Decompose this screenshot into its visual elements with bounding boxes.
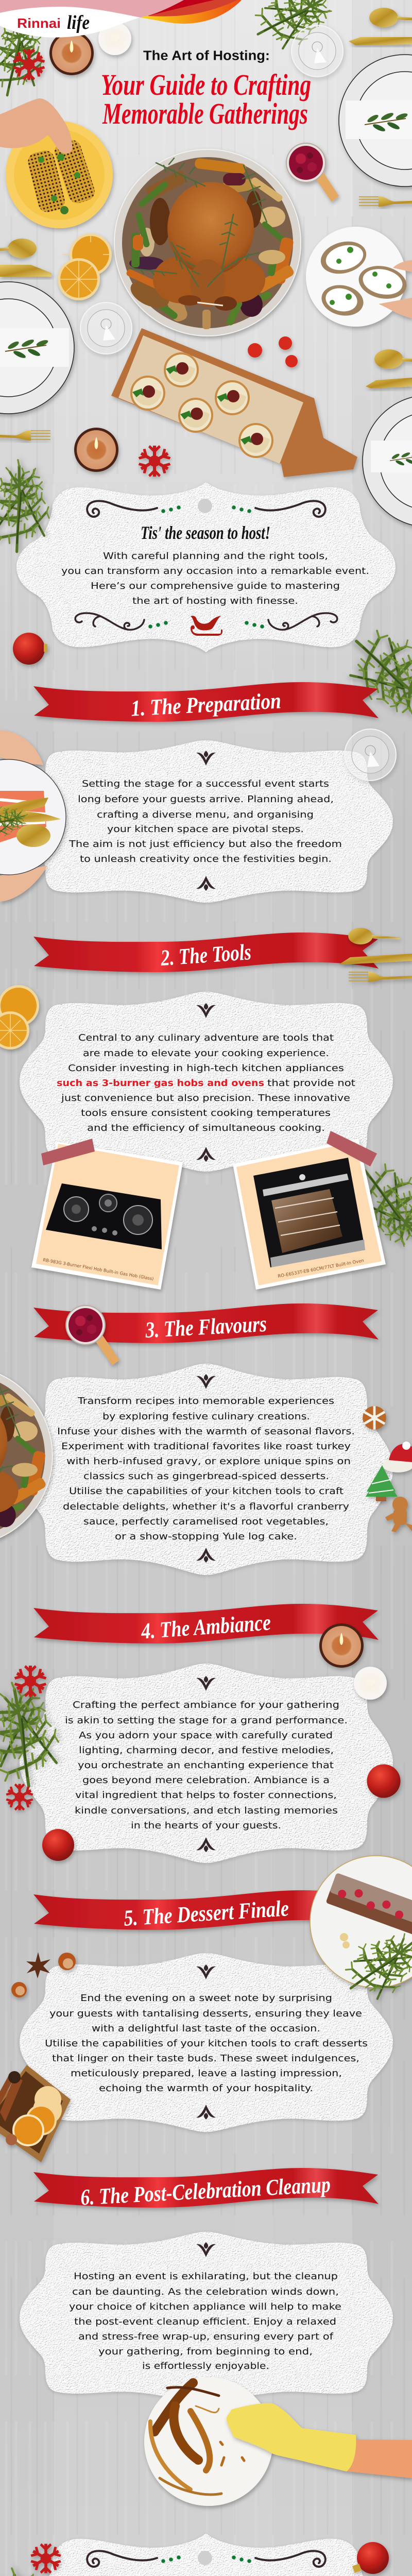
pine right bbox=[330, 612, 412, 744]
caption: RO-E6533T-EB 60CM/77LT Built-In Oven bbox=[278, 1258, 365, 1279]
logo: Rinnai life: life bbox=[67, 12, 90, 33]
pine left bbox=[0, 446, 75, 562]
tomatoes bbox=[248, 336, 298, 367]
text: in the hearts of your guests. bbox=[131, 1821, 281, 1831]
text: are made to elevate your cooking experience. bbox=[83, 1048, 329, 1059]
hang hole bbox=[198, 2551, 212, 2565]
text: with a delightful last taste of the occasion. bbox=[92, 2024, 320, 2034]
logo: Rinnai life bbox=[17, 12, 90, 33]
knife right bbox=[366, 378, 412, 388]
wooden board with canapes bbox=[111, 328, 357, 477]
dried orange slices bbox=[0, 985, 39, 1049]
text: echoing the warmth of your hospitality. bbox=[99, 2083, 313, 2094]
toast plate bbox=[306, 227, 412, 327]
star anise bbox=[26, 1952, 50, 1978]
text: to unleash creativity once the festivities begin. bbox=[80, 854, 332, 865]
panel: intro bbox=[16, 482, 396, 652]
text: your gathering, from beginning to end, bbox=[98, 2347, 313, 2357]
text: your choice of kitchen appliance will help to make bbox=[69, 2302, 341, 2312]
ribbon 5 bbox=[33, 1890, 379, 1931]
ribbon 3 bbox=[33, 1303, 379, 1365]
gold cutlery over ribbon 2 bbox=[339, 928, 412, 982]
text: lighting, charming decor, and festive melodies, bbox=[79, 1745, 334, 1756]
panel 2: the tools bbox=[20, 992, 393, 1172]
yellow plate with corn bbox=[6, 121, 113, 228]
glass lower bbox=[80, 302, 132, 354]
tape bbox=[327, 1131, 377, 1166]
intro text: With careful planning and the right tools, bbox=[103, 551, 328, 562]
panel 6: cleanup bbox=[20, 2232, 412, 2506]
title: Your Guide to Crafting bbox=[101, 68, 311, 101]
ornament top bbox=[196, 1374, 216, 1389]
knife top right bbox=[349, 37, 412, 45]
text: can be daunting. As the celebration winds down, bbox=[72, 2287, 339, 2297]
spoon bbox=[348, 928, 400, 944]
turkey platter bbox=[114, 149, 301, 336]
candle lower bbox=[74, 428, 118, 472]
cranberry bowl bbox=[66, 1306, 119, 1365]
snowflake upper bbox=[13, 1665, 47, 1697]
gingerbread bbox=[385, 1497, 412, 1532]
top flourishes bbox=[87, 2551, 325, 2567]
hand sprinkling herbs bbox=[0, 98, 72, 154]
text: delectable delights, whether it's a flavorful cranberry bbox=[63, 1502, 349, 1512]
text: classics such as gingerbread-spiced desserts. bbox=[83, 1471, 329, 1482]
plate top right bbox=[339, 55, 412, 187]
panel shape bbox=[16, 482, 396, 652]
fork bbox=[349, 972, 412, 982]
hob bbox=[46, 1183, 162, 1249]
text: kindle conversations, and etch lasting memories bbox=[75, 1806, 338, 1816]
panel: closing bbox=[0, 2533, 412, 2576]
ornament bottom bbox=[196, 1147, 216, 1162]
tealight top bbox=[98, 22, 131, 55]
intro text: the art of hosting with finesse. bbox=[132, 596, 298, 606]
hang hole bbox=[198, 499, 212, 513]
text: sauce, perfectly caramelised root vegetables, bbox=[83, 1517, 329, 1527]
hazelnuts bbox=[11, 1953, 76, 1997]
text bbox=[57, 1396, 355, 1542]
glass top right bbox=[291, 25, 343, 77]
title: The Art of Hosting: bbox=[143, 48, 270, 63]
ribbon 3: 3. The Flavours bbox=[144, 1311, 267, 1343]
green sprig top bbox=[249, 0, 345, 59]
cranberry bowl bbox=[286, 143, 339, 202]
snowflake cookie bbox=[363, 1406, 386, 1430]
text: Infuse your dishes with the warmth of seasonal flavors. bbox=[57, 1427, 355, 1437]
spoon right bbox=[374, 349, 412, 369]
text: long before your guests arrive. Planning ahead, bbox=[78, 794, 334, 805]
decor: greens and bauble around intro bbox=[0, 446, 412, 744]
intro text: Here’s our comprehensive guide to mastering bbox=[91, 581, 340, 591]
text: the post-event cleanup efficient. Enjoy a relaxed bbox=[74, 2317, 336, 2327]
candle bbox=[319, 1623, 364, 1668]
glass bbox=[345, 729, 396, 781]
text bbox=[45, 1993, 368, 2094]
tape bbox=[41, 1139, 95, 1165]
fork right bbox=[359, 196, 412, 207]
dried orange slices bbox=[58, 233, 112, 300]
text: End the evening on a sweet note by surprising bbox=[80, 1993, 332, 2004]
text: is effortlessly enjoyable. bbox=[142, 2361, 269, 2371]
bauble lower left bbox=[42, 1829, 74, 1861]
text: Utilise the capabilities of your kitchen tools to craft bbox=[69, 1486, 344, 1497]
text bbox=[69, 2272, 341, 2371]
top flourishes bbox=[87, 501, 325, 517]
text: Utilise the capabilities of your kitchen tools to craft desserts bbox=[45, 2039, 368, 2049]
snowflake lower bbox=[5, 1784, 34, 1810]
text: Crafting the perfect ambiance for your gathering bbox=[73, 1700, 339, 1710]
spoon top right bbox=[369, 8, 412, 27]
ornament bottom bbox=[196, 1548, 216, 1563]
turkey platter bbox=[0, 1366, 53, 1546]
panel 1: the preparation bbox=[0, 729, 396, 903]
text: or a show-stopping Yule log cake. bbox=[115, 1532, 297, 1542]
text bbox=[68, 779, 342, 865]
text: you orchestrate an enchanting experience that bbox=[78, 1760, 334, 1771]
pine right bbox=[328, 2572, 412, 2576]
tree cookie bbox=[366, 1465, 398, 1501]
plate held by hands bbox=[0, 730, 66, 902]
title: Memorable Gatherings bbox=[102, 97, 308, 130]
text: The aim is not just efficiency but also the freedom bbox=[68, 839, 342, 850]
text: with herb-infused gravy, or explore unique spins on bbox=[66, 1456, 351, 1467]
hero table setting illustration bbox=[0, 0, 412, 527]
text: your kitchen space are pivotal steps. bbox=[107, 824, 304, 835]
candle top bbox=[49, 31, 94, 75]
pine left bbox=[0, 2557, 79, 2576]
ribbon 2 bbox=[33, 933, 379, 972]
text: tools ensure consistent cooking temperatures bbox=[81, 1108, 331, 1118]
text: just convenience but also precision. These innovative bbox=[61, 1093, 350, 1104]
ribbon 4: 4. The Ambiance bbox=[140, 1609, 271, 1644]
text: your guests with tantalising desserts, ensuring they leave bbox=[49, 2009, 362, 2019]
photo card: oven bbox=[233, 1131, 386, 1290]
text: Transform recipes into memorable experiences bbox=[77, 1396, 334, 1406]
knife left bbox=[0, 265, 52, 277]
text bbox=[65, 1700, 348, 1831]
ribbon 1: 1. The Preparation bbox=[130, 688, 282, 721]
text: such as 3-burner gas hobs and ovens bbox=[57, 1078, 264, 1089]
text bbox=[57, 1033, 355, 1133]
ornament top bbox=[196, 2242, 216, 2257]
snowflake lower bbox=[138, 445, 171, 477]
tealight bbox=[354, 1667, 387, 1700]
ornament bottom bbox=[196, 876, 216, 891]
text: crafting a diverse menu, and organising bbox=[97, 810, 314, 820]
dirty plate bbox=[144, 2377, 273, 2506]
header: brand swoosh and logo bbox=[0, 0, 242, 38]
ribbon 1 bbox=[33, 682, 379, 722]
oven bbox=[253, 1158, 365, 1267]
photo card: gas hob bbox=[31, 1139, 183, 1290]
bauble bbox=[352, 2542, 389, 2574]
panel 5: the dessert finale bbox=[0, 1856, 412, 2162]
intro text bbox=[61, 551, 369, 606]
text: that provide not bbox=[267, 1078, 355, 1089]
text: that linger on their taste buds. These sweet indulgences, bbox=[52, 2054, 359, 2064]
green sprig left bbox=[0, 0, 71, 108]
caption: RB-983G 3-Burner Flexi Hob Built-in Gas Hob (Glass) bbox=[42, 1258, 154, 1282]
text: and the efficiency of simultaneous cooking. bbox=[87, 1123, 325, 1133]
subheading: Tis' the season to host! bbox=[141, 522, 270, 543]
panel shape bbox=[16, 2533, 396, 2576]
spice tray bbox=[0, 2065, 71, 2162]
text: Setting the stage for a successful event starts bbox=[82, 779, 329, 789]
text: is akin to setting the stage for a grand performance. bbox=[65, 1716, 348, 1726]
yellow glove and arm bbox=[227, 2403, 412, 2478]
plate left bbox=[0, 282, 74, 414]
bottom flourishes and sleigh bbox=[75, 613, 337, 636]
text: meticulously prepared, leave a lasting impression, bbox=[71, 2069, 342, 2079]
spoon left bbox=[0, 239, 37, 258]
bauble bbox=[13, 633, 47, 665]
panel 3: the flavours bbox=[0, 1364, 412, 1575]
ornament top bbox=[196, 751, 216, 766]
ribbon 4 bbox=[33, 1604, 379, 1644]
ornament bottom bbox=[196, 1837, 216, 1852]
text: Central to any culinary adventure are tools that bbox=[78, 1033, 334, 1043]
ornament bottom bbox=[196, 2105, 216, 2120]
ornament top bbox=[196, 1964, 216, 1979]
cookies bbox=[363, 1406, 412, 1532]
intro text: you can transform any occasion into a remarkable event. bbox=[61, 566, 369, 577]
text: Hosting an event is exhilarating, but the cleanup bbox=[74, 2272, 338, 2282]
snowflake bbox=[30, 2544, 62, 2573]
ribbon 6: 6. The Post-Celebration Cleanup bbox=[80, 2172, 331, 2210]
text: Experiment with traditional favorites like roast turkey bbox=[61, 1442, 351, 1452]
ornament top bbox=[196, 1676, 216, 1691]
panel 4: the ambiance bbox=[0, 1623, 401, 1863]
ribbon 5: 5. The Dessert Finale bbox=[123, 1895, 289, 1931]
text: vital ingredient that helps to foster connections, bbox=[75, 1790, 337, 1801]
ornament top bbox=[196, 1003, 216, 1018]
text: Consider investing in high-tech kitchen appliances bbox=[68, 1063, 344, 1074]
snowflake top bbox=[12, 48, 46, 80]
dessert plate with yule log bbox=[310, 1856, 412, 2012]
plate lower right bbox=[363, 395, 412, 527]
text: As you adorn your space with carefully curated bbox=[79, 1731, 333, 1741]
fork left bbox=[0, 430, 50, 440]
title bbox=[101, 48, 311, 130]
ribbon 2: 2. The Tools bbox=[160, 939, 252, 971]
pine right of oven bbox=[338, 1152, 412, 1267]
text: goes beyond mere celebration. Ambiance is a bbox=[82, 1775, 330, 1786]
pine left bbox=[0, 1671, 79, 1792]
bauble right bbox=[367, 1764, 401, 1798]
knife bbox=[339, 954, 412, 964]
logo: Rinnai life: Rinnai bbox=[17, 15, 61, 31]
text: and stress-free wrap-up, ensuring every part of bbox=[78, 2332, 334, 2342]
text: by exploring festive culinary creations. bbox=[102, 1412, 310, 1422]
santa hat bbox=[383, 1442, 412, 1472]
